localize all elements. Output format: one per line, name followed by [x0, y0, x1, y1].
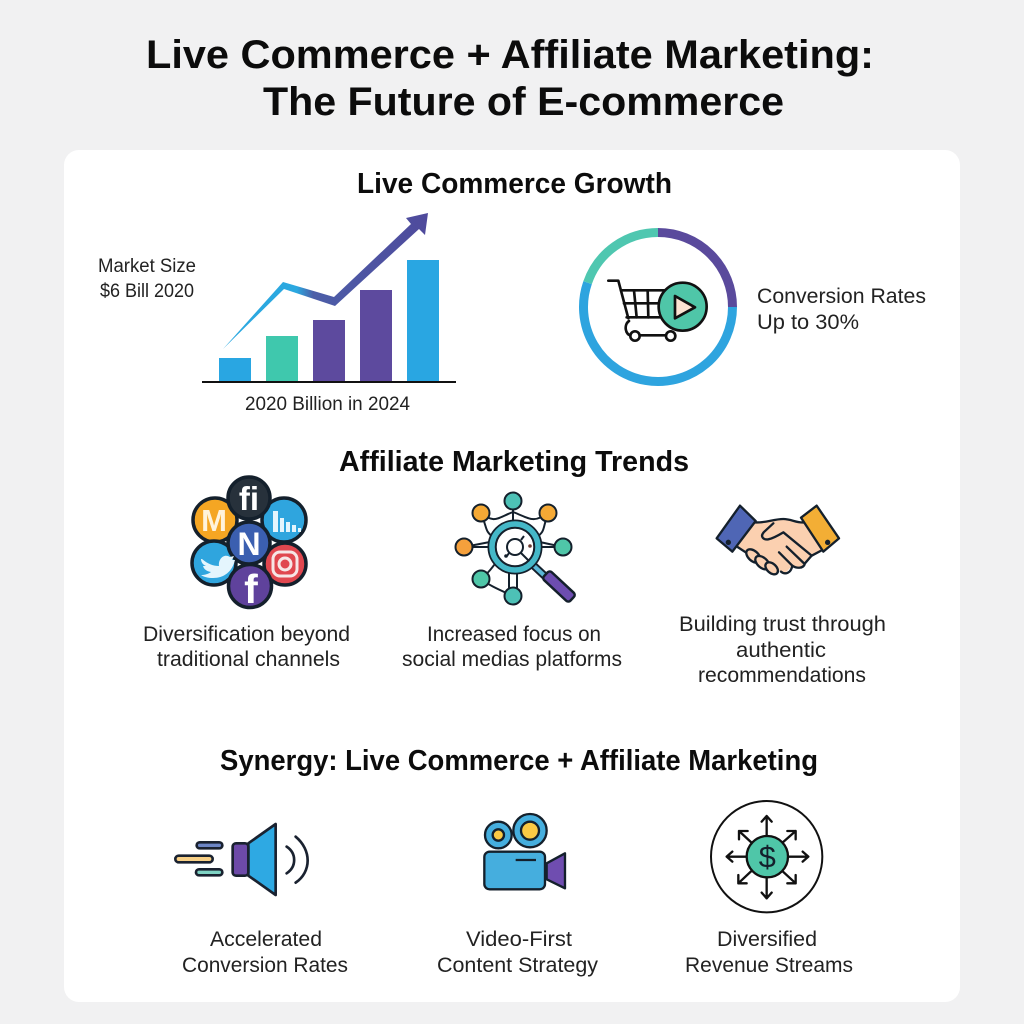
icon: revenue streams	[711, 801, 822, 912]
bar chart	[202, 213, 456, 383]
text: diversification	[143, 623, 350, 671]
heading: Affiliate Marketing Trends: Affiliate Marketing Trends	[339, 446, 689, 478]
icon: shopping cart	[608, 281, 707, 341]
text: accelerated: Accelerated	[210, 928, 322, 951]
text: diversified: Revenue Streams	[685, 954, 853, 977]
icon: video camera	[484, 814, 565, 889]
conversion rate label: Conversion Rates	[757, 285, 926, 308]
title: Live Commerce + Affiliate Marketing:	[146, 33, 874, 77]
text: accelerated	[182, 928, 348, 977]
icon: social media cluster: f	[244, 566, 258, 612]
text: video-first: Video-First	[466, 928, 572, 951]
icon: social media cluster	[192, 477, 306, 612]
conversion rate label	[757, 285, 926, 334]
text: social focus: Increased focus on	[427, 623, 601, 646]
text: social focus: social medias platforms	[402, 648, 622, 671]
icon: network magnifier	[456, 492, 576, 604]
icon: social media cluster: M	[201, 503, 227, 538]
chart axis label: 2020 Billion in 2024	[245, 394, 410, 415]
market size label	[98, 256, 196, 302]
icon: social media cluster: fi	[239, 480, 259, 517]
text: social focus	[402, 623, 622, 671]
market size label: $6 Bill 2020	[100, 281, 194, 302]
growth arrow	[223, 213, 428, 349]
icon: revenue streams: $	[759, 840, 776, 874]
text: video-first	[437, 928, 599, 977]
text: diversification: traditional channels	[157, 648, 340, 671]
text: diversification: Diversification beyond	[143, 623, 350, 646]
text: building trust: Building trust through	[679, 613, 886, 636]
heading: Synergy: Synergy: Live Commerce + Affiliate Marketing	[220, 745, 818, 777]
text: building trust	[679, 613, 886, 687]
text: diversified	[685, 928, 853, 977]
title	[146, 33, 874, 124]
icon: bar glyph	[273, 511, 301, 532]
panel: main card	[64, 150, 960, 1002]
icon: bird	[201, 556, 235, 578]
title: The Future of E-commerce	[263, 80, 784, 124]
icon: camera glyph	[273, 552, 297, 576]
icon: social media cluster: N	[237, 526, 261, 562]
ring with cart icon	[584, 232, 732, 381]
market size label: Market Size	[98, 256, 196, 277]
icon: megaphone	[175, 824, 308, 895]
heading: Live Commerce Growth: Live Commerce Growth	[357, 168, 672, 200]
conversion rate label: Up to 30%	[757, 311, 859, 334]
text: building trust: authentic	[736, 639, 826, 662]
icon: handshake	[717, 506, 839, 577]
text: diversified: Diversified	[717, 928, 817, 951]
text: video-first: Content Strategy	[437, 954, 599, 977]
text: accelerated: Conversion Rates	[182, 954, 348, 977]
text: building trust: recommendations	[698, 664, 866, 687]
